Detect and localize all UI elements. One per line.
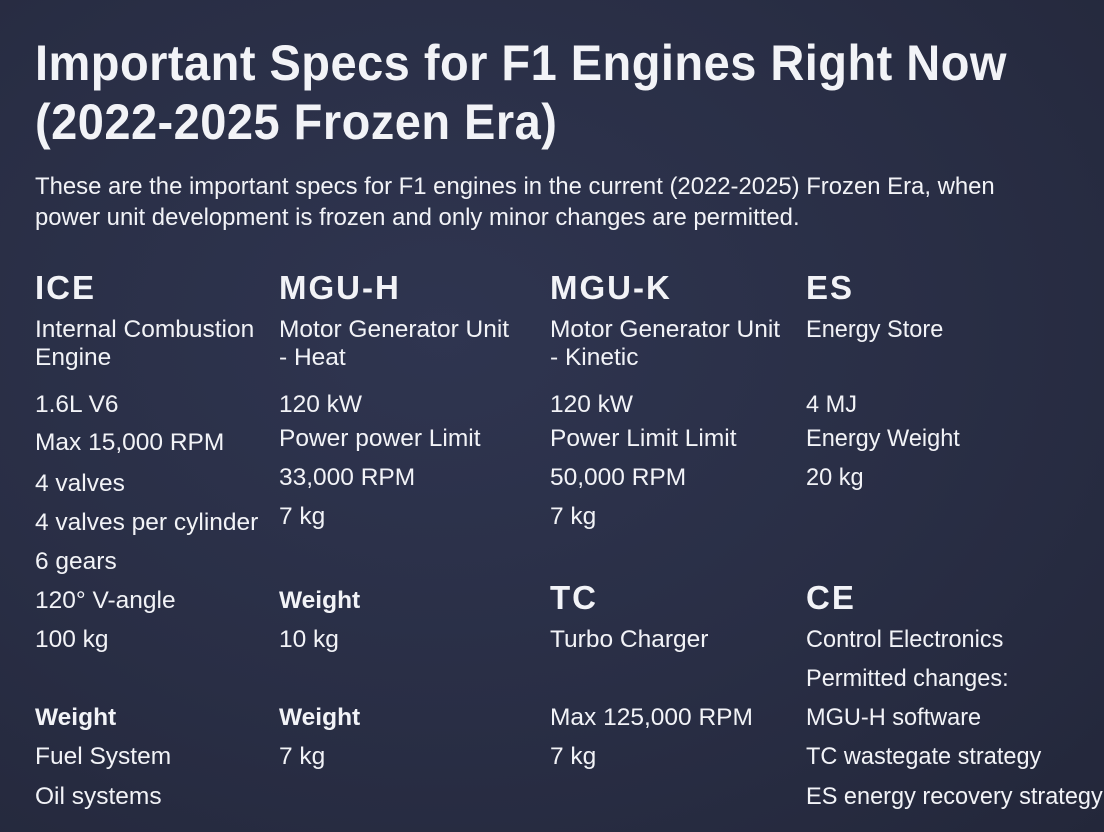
column: MGU-H: MGU-H — [279, 269, 401, 306]
column: MGU-K and TC: Max 125,000 RPM — [550, 704, 753, 731]
column: MGU-H: Weight — [279, 587, 360, 614]
column: MGU-K and TC — [550, 269, 780, 770]
column: MGU-K and TC: Power Limit Limit — [550, 425, 737, 452]
column: ES and CE: 4 MJ — [806, 391, 857, 418]
column: MGU-K and TC: Motor Generator Unit — [550, 316, 780, 343]
column: MGU-H: Weight — [279, 704, 360, 731]
column: ICE: Oil systems — [35, 783, 162, 810]
column: MGU-H: 7 kg — [279, 743, 325, 770]
column: ICE: Internal Combustion — [35, 316, 254, 343]
column: MGU-H: Power power Limit — [279, 425, 481, 452]
column: ICE: 1.6L V6 — [35, 391, 119, 418]
column: MGU-K and TC: 7 kg — [550, 503, 596, 530]
intro text: power unit development is frozen and only minor changes are permitted. — [35, 204, 800, 231]
column: ES and CE: CE — [806, 579, 856, 616]
column: ES and CE: Permitted changes: — [806, 665, 1009, 692]
column: MGU-H: 33,000 RPM — [279, 464, 415, 491]
column: MGU-K and TC: 120 kW — [550, 391, 633, 418]
column: ICE: Weight — [35, 704, 116, 731]
column: MGU-H: - Heat — [279, 344, 346, 371]
column: ES and CE: ES energy recovery strategy — [806, 783, 1103, 810]
column: MGU-K and TC: - Kinetic — [550, 344, 639, 371]
title: Important Specs for F1 Engines Right Now — [35, 35, 1007, 91]
column: ES and CE: 20 kg — [806, 464, 864, 491]
column: ES and CE: ES — [806, 269, 854, 306]
column: ICE: 4 valves per cylinder — [35, 509, 258, 536]
column: MGU-K and TC: 7 kg — [550, 743, 596, 770]
column: ICE: ICE — [35, 269, 96, 306]
column: ES and CE: Energy Store — [806, 316, 943, 343]
column: MGU-H: Motor Generator Unit — [279, 316, 509, 343]
column: ES and CE: Energy Weight — [806, 425, 960, 452]
column: MGU-H: 10 kg — [279, 626, 339, 653]
intro text: These are the important specs for F1 engines in the current (2022-2025) Frozen Era, when — [35, 173, 995, 200]
column: ES and CE — [806, 269, 1103, 810]
column: ICE: Engine — [35, 344, 111, 371]
column: MGU-K and TC: MGU-K — [550, 269, 672, 306]
column: ICE — [35, 269, 258, 810]
column: ES and CE: MGU-H software — [806, 704, 981, 731]
column: ICE: 120° V-angle — [35, 587, 176, 614]
column: MGU-K and TC: 50,000 RPM — [550, 464, 686, 491]
column: ICE: 100 kg — [35, 626, 109, 653]
column: ICE: Max 15,000 RPM — [35, 429, 224, 456]
column: ICE: 6 gears — [35, 548, 117, 575]
column: MGU-H — [279, 269, 509, 770]
column: MGU-H: 7 kg — [279, 503, 325, 530]
intro text — [35, 173, 995, 231]
title: (2022-2025 Frozen Era) — [35, 94, 557, 150]
column: ES and CE: Control Electronics — [806, 626, 1003, 653]
column: ES and CE: TC wastegate strategy — [806, 743, 1041, 770]
column: ICE: Fuel System — [35, 743, 171, 770]
title — [35, 35, 1007, 150]
column: MGU-H: 120 kW — [279, 391, 362, 418]
column: ICE: 4 valves — [35, 470, 125, 497]
column: MGU-K and TC: TC — [550, 579, 598, 616]
column: MGU-K and TC: Turbo Charger — [550, 626, 708, 653]
